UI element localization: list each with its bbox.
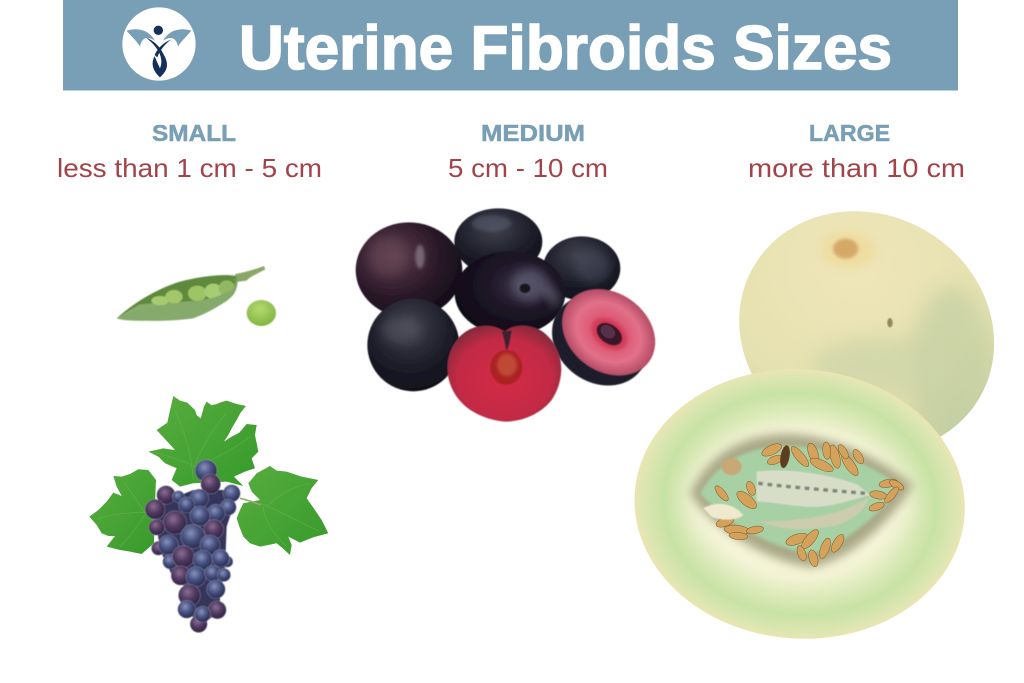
column heading: medium — [448, 120, 608, 183]
seed cavity — [690, 434, 913, 567]
left leaf — [89, 469, 156, 554]
pea pod and pea — [117, 266, 276, 326]
top leaf — [148, 396, 258, 487]
column heading: medium: MEDIUM — [481, 120, 585, 146]
whole melon — [739, 211, 994, 436]
title: Uterine Fibroids Sizes — [239, 14, 892, 83]
logo — [122, 7, 196, 81]
grapes — [145, 460, 240, 633]
column heading: small: SMALL — [152, 120, 236, 146]
grape bunch with leaves — [89, 396, 328, 633]
column heading: large: more than 10 cm — [748, 153, 965, 183]
cut plum bottom — [447, 325, 561, 422]
column heading: large: LARGE — [809, 120, 890, 146]
header banner — [63, 0, 958, 90]
column heading: large — [748, 120, 965, 183]
column heading: small: less than 1 cm - 5 cm — [57, 153, 322, 183]
column heading: medium: 5 cm - 10 cm — [448, 153, 608, 183]
honeydew melons — [634, 211, 994, 639]
cut plum right — [534, 269, 672, 405]
right leaf — [237, 466, 328, 555]
whole plums — [356, 208, 620, 391]
central membrane — [757, 470, 870, 507]
cut melon — [634, 370, 965, 639]
plums — [356, 208, 672, 422]
column heading: small — [57, 120, 322, 183]
